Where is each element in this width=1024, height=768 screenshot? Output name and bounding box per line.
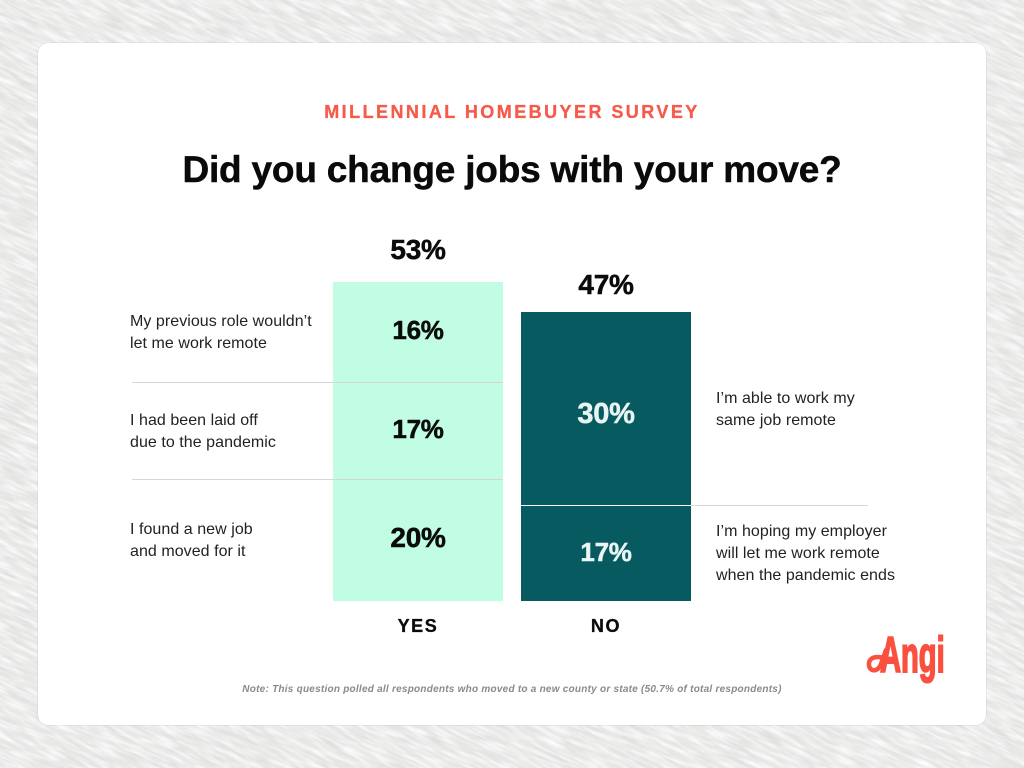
- yes value: 20%: 20%: [390, 522, 446, 553]
- label: same job remote: same job remote: [716, 412, 836, 429]
- yes total: 53%: [390, 234, 446, 265]
- column: no lower segment: [521, 506, 691, 601]
- label: hoping employer: when the pandemic ends: [716, 567, 895, 584]
- footnote: Note: This question polled all respondents who moved to a new county or state (50.7% of total respondents): [242, 684, 782, 695]
- label: hoping employer: [716, 523, 895, 584]
- label: same job remote: I’m able to work my: [716, 390, 855, 407]
- label: new job: [130, 521, 253, 560]
- column: yes: [333, 282, 503, 601]
- no total: 47%: [578, 269, 634, 300]
- column: no upper segment: [521, 312, 691, 505]
- label: hoping employer: I’m hoping my employer: [716, 523, 887, 540]
- label: same job remote: [716, 390, 855, 429]
- label: previous role: [130, 313, 312, 352]
- divider: yes row 2: [132, 479, 503, 480]
- yes value: 17%: 17%: [392, 414, 444, 444]
- label: laid off: [130, 412, 276, 451]
- label: new job: I found a new job: [130, 521, 253, 538]
- label: laid off: due to the pandemic: [130, 434, 276, 451]
- yes value: 16%: 16%: [392, 315, 444, 345]
- label: previous role: let me work remote: [130, 335, 267, 352]
- no value: 17%: 17%: [580, 537, 632, 567]
- no value: 30%: 30%: [577, 398, 635, 430]
- label: new job: and moved for it: [130, 543, 246, 560]
- axis label: yes: YES: [398, 616, 438, 636]
- label: hoping employer: will let me work remote: [716, 545, 880, 562]
- bar chart: [130, 234, 895, 636]
- axis label: no: NO: [591, 616, 621, 636]
- eyebrow heading: MILLENNIAL HOMEBUYER SURVEY: [324, 102, 700, 122]
- divider: no row: [691, 505, 868, 506]
- title: Did you change jobs with your move?: [182, 149, 842, 190]
- label: previous role: My previous role wouldn’t: [130, 313, 312, 330]
- label: laid off: I had been laid off: [130, 412, 258, 429]
- divider: yes row 1: [132, 382, 503, 383]
